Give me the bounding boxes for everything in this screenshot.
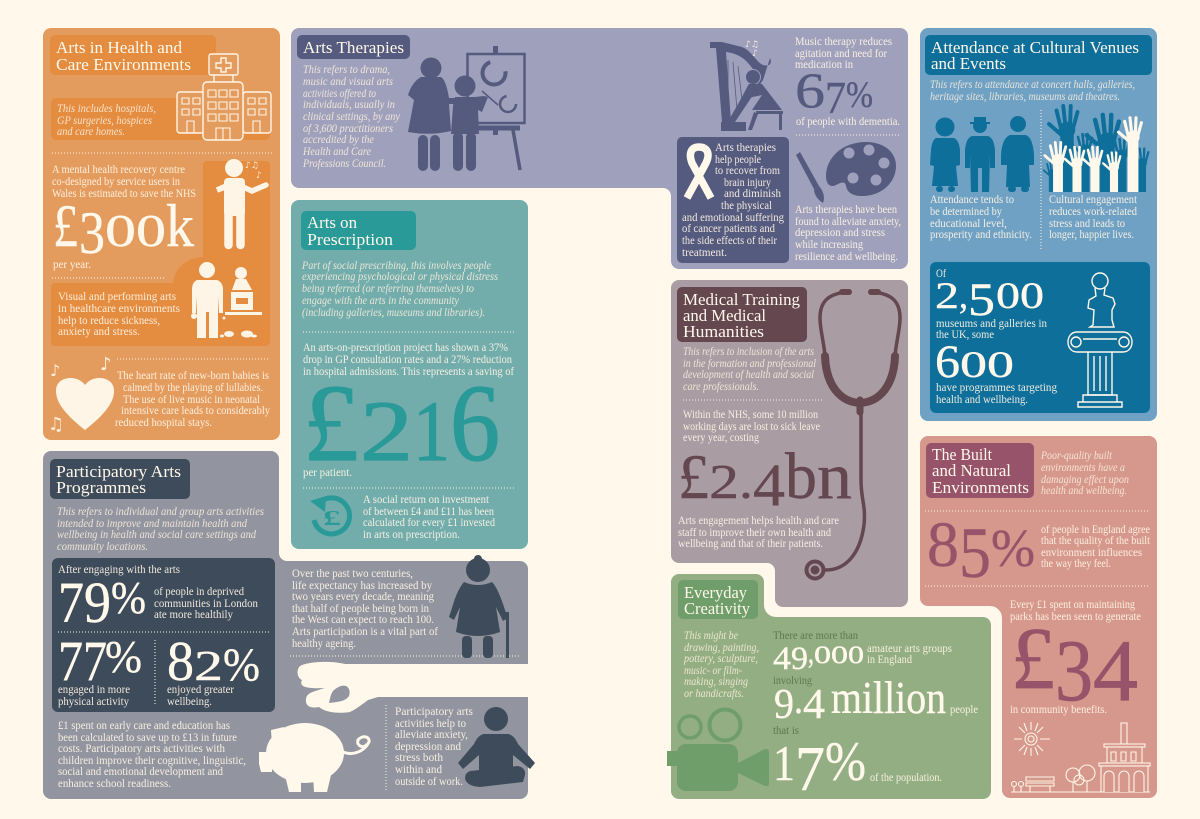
stat: 85%: 8 [927, 509, 959, 581]
icon: heart with music notes [48, 354, 114, 435]
dark ribbon callout: the side effects of their [682, 235, 777, 247]
text: life expectancy: Arts participation is a vital part of [292, 626, 438, 638]
icon: meditating person [458, 707, 535, 787]
79% caption [154, 586, 258, 621]
stat: £2.4bn: 4 [753, 452, 785, 518]
stat: 17%: % [825, 731, 866, 792]
stat: £300k: 0 [105, 205, 136, 256]
dark callout background [51, 161, 270, 346]
text: involving: involving [773, 675, 812, 687]
caption: programmes: have programmes targeting [936, 382, 1057, 394]
dark ribbon callout: brain injury [724, 177, 771, 189]
definition text: music- or film- [684, 665, 742, 677]
stat: £2.4bn: £ [678, 441, 709, 512]
stat: £216: £ [303, 362, 359, 484]
pink panel background [920, 436, 1157, 798]
text: new-born babies: The use of live music in neonatal [123, 394, 260, 406]
definition text [683, 346, 816, 393]
text: participatory arts and anxiety [395, 706, 474, 788]
text: new-born babies: The heart rate of new-born babies is [117, 370, 269, 382]
stat: 600: 6 [935, 336, 960, 388]
stat: 49,000: 4 [773, 641, 791, 677]
heading [926, 443, 1034, 498]
green panel background [671, 574, 991, 799]
grey panel background [43, 451, 528, 799]
text: music therapy [795, 36, 892, 71]
heading: Medical Training [683, 290, 800, 309]
definition text: of 3,600 practitioners [303, 123, 393, 135]
stat: £2.4bn: 2 [709, 454, 739, 509]
definition text: Part of social prescribing, this involves people [301, 260, 491, 272]
definition text: community locations. [57, 541, 148, 553]
icon: classical statue on column [1068, 273, 1132, 407]
stat: 9.4 million: 4 [803, 682, 825, 728]
definition text [302, 64, 401, 170]
caption: amateur arts groups: in England [867, 654, 912, 666]
stat: 9.4 million: . [794, 677, 803, 723]
definition text: This refers to inclusion of the arts [683, 346, 814, 358]
icon: singer: ♪ [256, 171, 262, 181]
stat: 79%: 9 [84, 570, 111, 635]
stat: 77%: % [105, 631, 142, 682]
text: visual and performing arts: anxiety and stress. [58, 326, 140, 338]
body text: staff health [678, 515, 839, 550]
text: cultural engagement: stress and leads to [1049, 218, 1125, 230]
text: social return: calculated for every £1 invested [363, 517, 495, 529]
orange panel background [43, 28, 280, 440]
definition text: damaging effect upon [1041, 474, 1129, 486]
panel: medical training and medical humanities [671, 280, 908, 607]
icon: raised hands [1042, 104, 1150, 192]
teal panel background [291, 200, 528, 549]
text: music therapy: Music therapy reduces [795, 36, 892, 48]
stat: 2,500: 0 [996, 276, 1020, 317]
text: there are more than: There are more than [773, 630, 858, 642]
text: visual and performing arts: in healthcare environments [58, 303, 181, 315]
definition text [1040, 450, 1129, 497]
icon: heart with music notes: ♫ [48, 414, 64, 435]
caption: quality of built environment: of people in England agree [1041, 524, 1150, 536]
stat: £216: 1 [413, 383, 450, 479]
panel: arts in health and care environments [43, 28, 280, 440]
stat: 49,000: 9 [791, 641, 808, 677]
icon: harpist: ♪♫ [745, 40, 759, 50]
icon: piggy bank [259, 723, 369, 792]
definition text: Professions Council. [302, 158, 386, 170]
body text: Within the NHS, some 10 million [683, 409, 818, 421]
panel: arts on prescription [291, 200, 528, 549]
caption: museums and galleries: the UK, some [936, 329, 994, 341]
dark ribbon callout: of cancer patients and [682, 223, 775, 235]
text: every £1 on parks [1010, 599, 1141, 623]
stat: 49,000: 0 [814, 642, 831, 669]
text: life expectancy [292, 568, 438, 650]
icon: hand dropping coin [298, 662, 528, 713]
museums statistic box: Of [936, 268, 946, 280]
text: every £1 on parks: Every £1 spent on maintaining [1010, 599, 1135, 611]
text: visual and performing arts: Visual and performing arts [58, 291, 176, 303]
stat: 49,000: 0 [848, 642, 864, 669]
heading: Attendance at Cultural Venues [931, 38, 1139, 57]
definition text: activities offered to [303, 88, 376, 100]
icon: circular arrow with pound sign: £ [323, 506, 341, 530]
heading [677, 287, 807, 342]
panel: attendance at cultural venues and events [920, 28, 1157, 421]
text: attendance: Attendance tends to [930, 194, 1014, 206]
dark ribbon callout: and diminish [724, 188, 781, 200]
dark ribbon callout: Arts therapies [715, 142, 776, 154]
text: early care and education [58, 720, 246, 790]
text: participatory arts and anxiety: Participatory arts [395, 706, 474, 718]
text: music therapy: medication in [795, 59, 853, 71]
definition text: This refers to individual and group arts activities [57, 506, 264, 518]
body text: drop in GP consultation rates and a 27% reduction [303, 354, 512, 366]
stat captions: wellbeing. [167, 696, 212, 708]
caption: amateur arts groups [867, 643, 952, 666]
definition text: pottery, sculpture, [683, 653, 758, 665]
text: life expectancy: the West can expect to reach 100. [292, 614, 434, 626]
heading: Prescription [307, 230, 394, 249]
stat: 79%: % [111, 572, 146, 623]
text: cultural engagement: Cultural engagement [1049, 194, 1138, 206]
stat: 9.4 million: 9 [774, 682, 794, 728]
text: life expectancy: healthy ageing. [292, 638, 356, 650]
stat: 67%: 6 [795, 62, 825, 118]
text: alleviate anxiety: while increasing [795, 239, 863, 251]
text: participatory arts and anxiety: stress both [395, 752, 443, 764]
definition text: being referred (or referring themselves) to [302, 283, 474, 295]
icon: elderly woman with cane [449, 555, 509, 658]
definition text: accredited by the [303, 134, 374, 146]
definition text: Poor-quality built [1040, 450, 1113, 462]
text: visual and performing arts [58, 291, 181, 338]
heading: Care Environments [56, 55, 191, 74]
stat: 77%: 7 [83, 630, 107, 693]
icon: singer [217, 159, 266, 245]
caption: of the population: of the population. [870, 772, 942, 784]
heading: Programmes [56, 478, 146, 497]
text: life expectancy: Over the past two centuries, [292, 568, 413, 580]
definition text: engage with the arts in the community [302, 295, 460, 307]
definition text: clinical settings, by any [303, 111, 401, 123]
stat: 77%: 7 [58, 630, 83, 693]
text: new-born babies [115, 370, 270, 429]
text: social return: in arts on prescription. [363, 529, 460, 541]
icon: harpist: ♪ [752, 49, 758, 59]
stat: £2.4bn: . [739, 454, 753, 509]
panel: the built and natural environments [920, 436, 1157, 798]
icon: film camera [667, 710, 769, 791]
text: attendance: prosperity and ethnicity. [930, 229, 1032, 241]
body text: staff health: staff to improve their own health and [678, 527, 831, 539]
text: early care and education: been calculated to save up to £13 in future [58, 732, 237, 744]
text: alleviate anxiety: found to alleviate anxiety, [795, 216, 901, 228]
text: early care and education: £1 spent on early care and education has [58, 720, 230, 732]
dark ribbon callout: the physical [721, 200, 772, 212]
definition text [683, 630, 759, 700]
stat: 82%: 8 [167, 631, 194, 693]
text: every £1 on parks: parks has been seen to generate [1010, 611, 1141, 623]
definition text: This might be [684, 630, 738, 642]
icon: harpist [710, 40, 783, 131]
definition text: Health and Care [302, 146, 371, 158]
per patient caption: per patient. [303, 467, 352, 479]
text: new-born babies: reduced hospital stays. [115, 417, 212, 429]
text: participatory arts and anxiety: outside of work. [395, 776, 463, 788]
text: cultural engagement [1049, 194, 1138, 241]
museums statistic box [930, 262, 1150, 413]
heading: Creativity [684, 599, 750, 618]
stat: 2,500: , [959, 276, 968, 317]
stat: 2,500: 5 [968, 274, 995, 326]
icon: park bench and trees [1011, 765, 1150, 792]
lilac panel background [291, 28, 908, 269]
icon: singer: ♪♫ [245, 161, 259, 171]
stat: 49,000: , [808, 635, 814, 671]
heading: Everyday [684, 583, 747, 602]
text: new-born babies: intensive care leads to considerably [121, 405, 270, 417]
caption: programmes: health and wellbeing. [936, 394, 1028, 406]
heading [925, 35, 1152, 75]
icon: three diverse people [930, 116, 1034, 192]
per year caption: per year. [53, 259, 91, 271]
text: participatory arts and anxiety: depression and [395, 741, 461, 753]
icon: man and bust sculpture [191, 262, 262, 338]
body text: working days are lost to sick leave [683, 421, 820, 433]
text: early care and education: children improve their cognitive, linguistic, [58, 755, 246, 767]
definition text [930, 79, 1135, 103]
text: participatory arts and anxiety: alleviate anxiety, [395, 729, 468, 741]
dark ribbon callout: treatment. [682, 247, 727, 259]
body text: staff health: wellbeing and that of their patients. [678, 538, 823, 550]
body text: in hospital admissions. This represents a saving of [303, 366, 514, 378]
panel: participatory arts programmes [43, 451, 535, 799]
caption: people: people [950, 704, 978, 716]
79% caption: of people in deprived [154, 586, 244, 598]
icon: stethoscope [806, 292, 900, 578]
definition text: making, singing [684, 676, 748, 688]
stat: 85%: 5 [959, 513, 991, 593]
body: recovery centre: A mental health recovery centre [52, 164, 185, 176]
79% caption: communities in London [154, 598, 258, 610]
body: recovery centre: co-designed by service users in [52, 176, 180, 188]
icon: circular arrow with pound sign [310, 496, 350, 534]
dark ribbon callout [677, 137, 789, 263]
definition text [301, 260, 498, 319]
dark ribbon callout: and emotional suffering [682, 212, 784, 224]
caption: museums and galleries: museums and galleries in [936, 318, 1047, 330]
heading: Participatory Arts [56, 462, 181, 481]
text: cultural engagement: longer, happier lives. [1049, 229, 1134, 241]
stat: £300k: £ [53, 193, 78, 259]
heading [301, 211, 416, 250]
heading: and Events [931, 54, 1006, 73]
stat: 17%: 7 [795, 733, 825, 804]
stat: 67%: 7 [825, 73, 846, 123]
dementia caption: of people with dementia. [796, 116, 900, 128]
definition text: GP surgeries, hospices [57, 115, 152, 127]
definition text: development of health and social [683, 369, 814, 381]
definition text: and care homes. [57, 126, 125, 138]
stat: £300k: k [166, 193, 194, 259]
definition text: in the formation and professional [683, 358, 816, 370]
text: social return: of between £4 and £11 has been [363, 506, 494, 518]
stat: 9.4 million: million [831, 673, 946, 723]
stat: £34: 3 [1055, 623, 1093, 720]
text: early care and education: costs. Participatory arts activities with [58, 743, 225, 755]
stat: 2,500: 0 [1020, 276, 1044, 317]
text: early care and education: enhance school readiness. [58, 778, 171, 790]
79% caption: ate more healthily [154, 609, 233, 621]
definition text: environments have a [1041, 462, 1125, 474]
text: life expectancy: that half of people being born in [292, 603, 429, 615]
body text [303, 342, 514, 378]
icon: adult and child painting at an easel [408, 46, 524, 171]
heading [50, 35, 216, 75]
definition text: or handicrafts. [684, 688, 744, 700]
dark ribbon callout: to recover from [715, 165, 780, 177]
stat: £216: 6 [450, 362, 500, 484]
body text: every year, costing [683, 432, 759, 444]
text: social return [363, 494, 495, 541]
text: life expectancy: life expectancy has increased by [292, 580, 432, 592]
stat: 2,500: 2 [935, 276, 959, 317]
heading: Arts in Health and [56, 38, 183, 57]
definition text: music and visual arts [303, 76, 393, 88]
caption: quality of built environment: environment influences [1041, 547, 1142, 559]
definition text: (including galleries, museums and libraries). [302, 307, 485, 319]
definition text: health and wellbeing. [1041, 485, 1127, 497]
text: life expectancy: two years every decade, meaning [292, 591, 434, 603]
heading: Arts on [307, 213, 357, 232]
stat: 600: 0 [960, 345, 987, 386]
stat: £216: 2 [360, 383, 413, 479]
text: cultural engagement: reduces work-related [1049, 206, 1137, 218]
definition text: wellbeing in health and social care settings and [57, 529, 256, 541]
stat: 67%: % [846, 75, 873, 116]
text: participatory arts and anxiety: activities help to [395, 718, 466, 730]
icon: heart with music notes: ♪ [100, 354, 112, 375]
text: alleviate anxiety: Arts therapies have been [795, 204, 897, 216]
stat captions: engaged in more [58, 684, 130, 696]
stat: 82%: % [223, 639, 260, 691]
text: early care and education: social and emotional development and [58, 766, 223, 778]
body: recovery centre [52, 164, 196, 200]
stat: 17%: 1 [773, 735, 795, 791]
stat captions: physical activity [58, 696, 129, 708]
text: participatory arts and anxiety: within and [395, 764, 442, 776]
heading [678, 580, 758, 619]
definition text: intended to improve and maintain health and [57, 518, 247, 530]
body: recovery centre: Wales is estimated to save the NHS [52, 188, 196, 200]
heading [50, 459, 190, 499]
definition text: drawing, painting, [684, 642, 759, 654]
panel: everyday creativity [667, 574, 991, 804]
definition text: care professionals. [683, 381, 759, 393]
heading: and Natural [932, 461, 1011, 480]
heading: Humanities [683, 322, 764, 341]
mauve panel background [671, 280, 908, 607]
caption: quality of built environment: that the quality of the built [1041, 535, 1151, 547]
heading: The Built [932, 445, 992, 464]
dark ribbon callout: help people [715, 154, 761, 166]
statistics box [52, 558, 275, 712]
stat captions: enjoyed greater [167, 684, 234, 696]
definition text: individuals, usually in [303, 99, 395, 111]
heading: Arts Therapies [303, 38, 404, 57]
caption: community benefits: in community benefits. [1010, 704, 1107, 716]
definition text: This includes hospitals, [57, 103, 156, 115]
stat: 82%: 2 [194, 644, 223, 690]
blue panel background [920, 28, 1157, 421]
icon: historic building [1099, 723, 1150, 792]
icon: palette and brush [796, 142, 896, 203]
text: alleviate anxiety: depression and stress [795, 227, 885, 239]
definition text: This refers to attendance at concert halls, galleries, [930, 79, 1135, 91]
definition text: This refers to drama, [303, 64, 390, 76]
caption: programmes [936, 382, 1057, 406]
definition text [51, 98, 270, 140]
body text: An arts-on-prescription project has shown a 37% [303, 342, 508, 354]
icon: sun [1014, 722, 1050, 756]
stat: 85%: % [991, 520, 1035, 578]
definition text: heritage sites, libraries, museums and theatres. [930, 91, 1120, 103]
stat: 600: 0 [987, 345, 1014, 386]
text: that is: that is [773, 725, 799, 737]
definition text: experiencing psychological or physical distress [302, 271, 498, 283]
stat: 79%: 7 [58, 570, 84, 635]
stat: £2.4bn: b [785, 440, 817, 513]
text: attendance: be determined by [930, 206, 1002, 218]
stat: £2.4bn: n [817, 440, 852, 513]
caption: quality of built environment: the way they feel. [1041, 558, 1111, 570]
text: alleviate anxiety [795, 204, 901, 263]
stat: £300k: 0 [136, 205, 166, 256]
stat: £34: 4 [1093, 623, 1138, 720]
stat: £300k: 3 [79, 200, 105, 266]
panel: arts therapies [291, 28, 908, 269]
body text [683, 409, 820, 444]
icon: hospital [177, 54, 271, 140]
text: new-born babies: calmed by the playing of lullabies. [123, 382, 263, 394]
text: music therapy: agitation and need for [795, 48, 887, 60]
text: attendance: educational level, [930, 218, 1007, 230]
stat: £34: £ [1011, 611, 1055, 708]
caption: quality of built environment [1041, 524, 1151, 570]
definition text [57, 506, 264, 553]
icon: awareness ribbon [687, 147, 711, 198]
text: attendance [930, 194, 1032, 241]
stat: 49,000: 0 [831, 642, 848, 669]
heading: Environments [932, 478, 1029, 497]
caption: museums and galleries [936, 318, 1047, 341]
text: social return: A social return on investment [363, 494, 490, 506]
text: visual and performing arts: help to reduce sickness, [58, 315, 160, 327]
text: alleviate anxiety: resilience and wellbeing. [795, 251, 898, 263]
heading: and Medical [683, 306, 766, 325]
statistics box: After engaging with the arts [58, 564, 180, 576]
caption: amateur arts groups: amateur arts groups [867, 643, 952, 655]
stat captions [58, 684, 234, 708]
icon: heart with music notes: ♪ [50, 361, 60, 380]
body text: staff health: Arts engagement helps health and care [678, 515, 839, 527]
